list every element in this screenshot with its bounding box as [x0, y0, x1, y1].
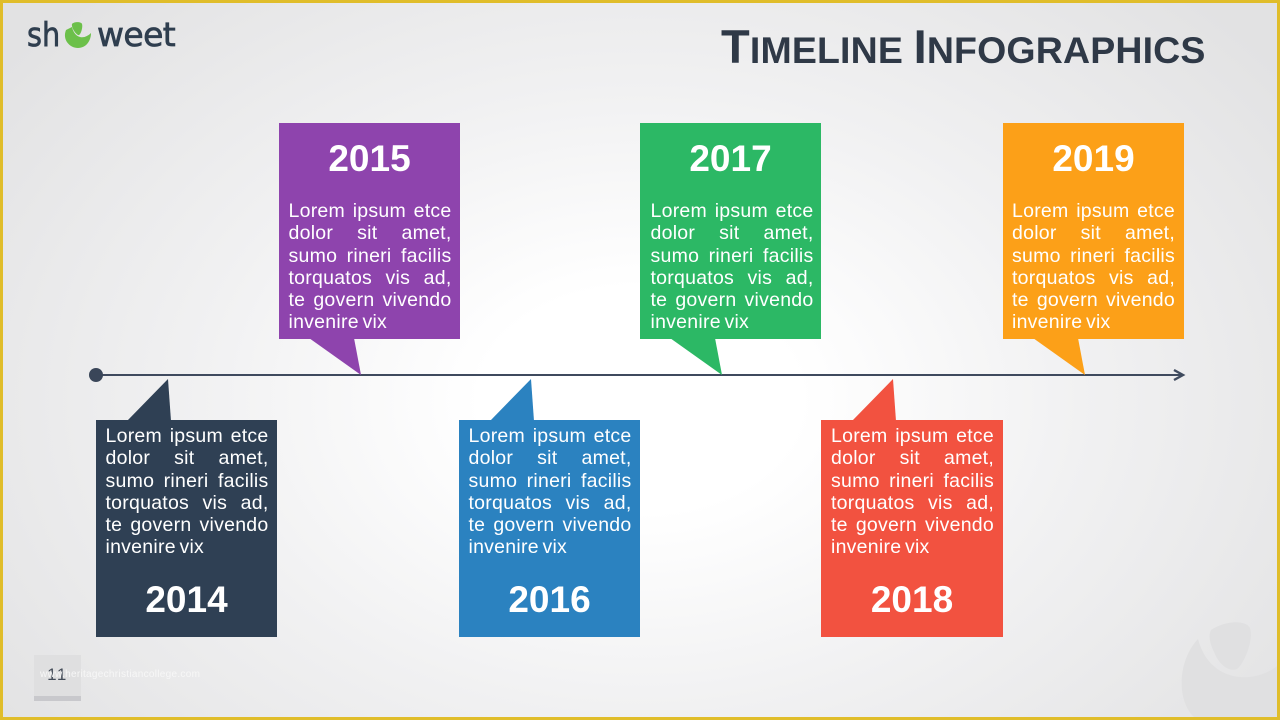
body text 2019	[1012, 200, 1175, 333]
card: 2017	[640, 123, 821, 339]
body text 2017: invenire vix	[650, 311, 749, 333]
body text 2018: torquatos vis ad,	[831, 492, 994, 514]
card: 2014	[96, 420, 277, 637]
body text 2019: Lorem ipsum etce	[1012, 200, 1175, 222]
body text 2014: invenire vix	[106, 536, 204, 558]
body text 2014: torquatos vis ad,	[106, 492, 268, 514]
page number block	[34, 655, 81, 701]
body text 2015: invenire vix	[288, 311, 387, 333]
year 2017: 2017	[689, 138, 772, 179]
body text 2014: te govern vivendo	[106, 514, 268, 536]
body text 2017: Lorem ipsum etce	[650, 200, 814, 222]
title: TIMELINE INFOGRAPHICS	[721, 20, 1206, 73]
card: 2018	[821, 420, 1003, 637]
body text 2019: sumo rineri facilis	[1012, 245, 1175, 267]
body text 2015: sumo rineri facilis	[288, 245, 452, 267]
logo text right: weet	[97, 15, 175, 54]
body text 2018: invenire vix	[831, 536, 930, 558]
body text 2019: te govern vivendo	[1012, 289, 1175, 311]
logo text left: sh	[27, 15, 60, 54]
body text 2014: sumo rineri facilis	[106, 470, 268, 492]
body text 2014: dolor sit amet,	[106, 447, 268, 469]
body text 2018: te govern vivendo	[831, 514, 994, 536]
body text 2016: te govern vivendo	[468, 514, 632, 536]
body text 2016: Lorem ipsum etce	[468, 425, 632, 447]
year 2014: 2014	[145, 579, 228, 620]
body text 2018: dolor sit amet,	[831, 447, 994, 469]
body text 2016: torquatos vis ad,	[468, 492, 632, 514]
body text 2016: dolor sit amet,	[468, 447, 632, 469]
body text 2015: dolor sit amet,	[288, 222, 452, 244]
body text 2018: sumo rineri facilis	[831, 470, 994, 492]
logo icon: green mark	[64, 22, 91, 48]
page number: 11	[47, 665, 68, 684]
card: 2016	[459, 420, 640, 637]
body text 2018: Lorem ipsum etce	[831, 425, 994, 447]
body text 2016: sumo rineri facilis	[468, 470, 632, 492]
body text 2017: te govern vivendo	[650, 289, 814, 311]
year 2016: 2016	[508, 579, 591, 620]
body text 2017	[650, 200, 814, 333]
card: 2019	[1003, 123, 1184, 339]
body text 2015: Lorem ipsum etce	[288, 200, 452, 222]
card: 2015	[279, 123, 460, 339]
body text 2015	[288, 200, 452, 333]
logo: showeet	[27, 15, 176, 54]
year 2019: 2019	[1052, 138, 1135, 179]
body text 2016: invenire vix	[468, 536, 567, 558]
body text 2019: dolor sit amet,	[1012, 222, 1175, 244]
year 2015: 2015	[328, 138, 411, 179]
body text 2015: torquatos vis ad,	[288, 267, 452, 289]
body text 2014	[106, 425, 268, 558]
body text 2019: torquatos vis ad,	[1012, 267, 1175, 289]
body text 2017: sumo rineri facilis	[650, 245, 814, 267]
watermark url: www.heritagechristiancollege.com	[40, 669, 200, 680]
body text 2017: dolor sit amet,	[650, 222, 814, 244]
body text 2019: invenire vix	[1012, 311, 1111, 333]
body text 2016	[468, 425, 632, 558]
body text 2018	[831, 425, 994, 558]
body text 2015: te govern vivendo	[288, 289, 452, 311]
body text 2017: torquatos vis ad,	[650, 267, 814, 289]
page number bar	[34, 696, 81, 701]
year 2018: 2018	[871, 579, 953, 620]
body text 2014: Lorem ipsum etce	[106, 425, 268, 447]
